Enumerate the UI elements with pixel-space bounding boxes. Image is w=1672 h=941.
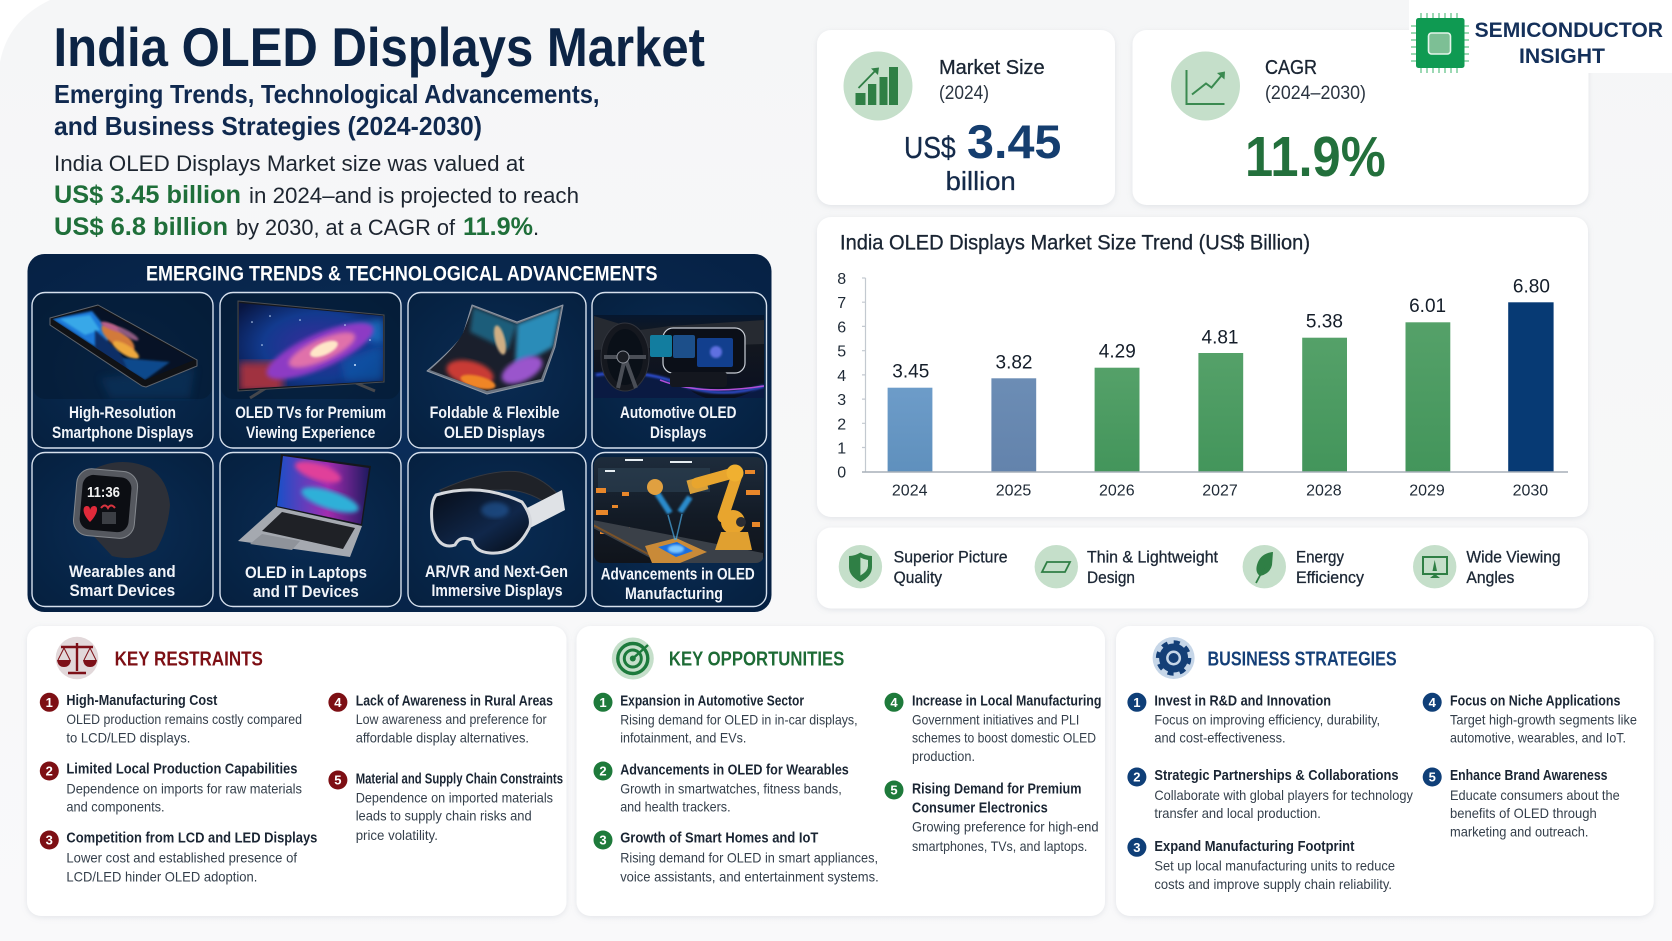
feature: wide viewing angles: [1413, 545, 1561, 588]
restraint 1: [40, 693, 302, 745]
tile labels: Smartphone Displays: [52, 424, 194, 442]
subtitle: [54, 79, 600, 141]
logo text: SEMICONDUCTOR: [1475, 19, 1663, 42]
bar value labels: 3.82: [996, 352, 1032, 373]
summary text: in 2024–and is projected to reach: [249, 183, 579, 208]
panel: business strategies: [1116, 626, 1654, 916]
feature: superior picture quality: Superior Picture: [894, 547, 1008, 566]
heading: BUSINESS STRATEGIES: [1208, 649, 1397, 671]
opportunity 4: Government initiatives and PLI: [912, 711, 1079, 727]
restraint 3: 3: [46, 833, 53, 848]
strategy 2: Collaborate with global players for technology: [1154, 787, 1413, 803]
y axis: 1: [837, 440, 846, 458]
restraint 4: affordable display alternatives.: [356, 730, 529, 746]
x axis years: 2024: [892, 483, 928, 500]
strategy 5: 5: [1429, 770, 1436, 785]
y axis: 2: [837, 416, 846, 433]
summary text: US$ 6.8 billion: [54, 213, 228, 241]
restraint 5: Dependence on imported materials: [356, 789, 553, 805]
strategy 4: Target high-growth segments like: [1450, 711, 1637, 727]
strategy 4: automotive, wearables, and IoT.: [1450, 729, 1626, 745]
subtitle: Emerging Trends, Technological Advancements,: [54, 79, 600, 109]
icon: scales: [56, 637, 98, 679]
opportunity 3: Rising demand for OLED in smart appliances,: [620, 850, 878, 866]
y axis: 4: [837, 368, 846, 385]
strategy 2: 2: [1133, 770, 1141, 785]
feature: energy efficiency: Energy: [1296, 547, 1344, 566]
strategy 4: Focus on Niche Applications: [1450, 694, 1620, 710]
CAGR value: 11.9%: [1245, 125, 1386, 189]
x axis years: 2028: [1306, 483, 1342, 500]
y axis: 5: [837, 344, 846, 361]
CAGR label: CAGR: [1265, 56, 1317, 79]
card: market size: [817, 30, 1115, 205]
tile: wearables: 11:36: [87, 484, 120, 501]
restraint 5: Material and Supply Chain Constraints: [356, 772, 563, 788]
logo text: [1475, 19, 1663, 68]
feature: superior picture quality: Quality: [894, 568, 943, 587]
feature: energy efficiency: Efficiency: [1296, 568, 1364, 587]
opportunity 4: production.: [912, 748, 975, 764]
opportunity 2: 2: [599, 764, 607, 779]
bar chart: [837, 271, 1568, 500]
market size value: 3.45: [967, 115, 1061, 168]
feature: wide viewing angles: Wide Viewing: [1466, 547, 1561, 566]
restraint 3: Competition from LCD and LED Displays: [66, 831, 317, 847]
strategy 3: costs and improve supply chain reliability.: [1154, 876, 1392, 892]
strategy 4: 4: [1429, 695, 1437, 710]
restraint 4: 4: [334, 695, 342, 710]
bar value labels: [892, 276, 1550, 383]
panel: key features: [817, 528, 1588, 608]
restraint 2: [40, 761, 302, 815]
tile labels: AR/VR and Next-Gen: [425, 563, 568, 581]
strategy 1: Invest in R&D and Innovation: [1154, 694, 1331, 710]
panel: emerging trends: [28, 254, 772, 612]
feature: thin and lightweight: Design: [1087, 568, 1135, 587]
opportunity 1: [594, 693, 858, 745]
bar value labels: 3.45: [892, 362, 929, 383]
market size label: (2024): [939, 83, 989, 104]
tile: smartphone displays: [32, 292, 213, 448]
icon: trend line: [1171, 52, 1240, 120]
restraint 5: 5: [334, 773, 342, 788]
panel: market size trend chart: [817, 217, 1588, 517]
title: India OLED Displays Market: [54, 16, 705, 78]
restraint 3: [40, 830, 317, 885]
opportunity 1: Rising demand for OLED in in-car displays,: [620, 711, 858, 727]
tile: automotive displays: [592, 292, 766, 448]
tile labels: High-Resolution: [69, 404, 176, 422]
feature: superior picture quality: [839, 545, 1008, 588]
restraint 1: OLED production remains costly compared: [66, 711, 302, 727]
bar value labels: 4.81: [1202, 327, 1238, 348]
restraint 3: LCD/LED hinder OLED adoption.: [66, 869, 257, 885]
chart heading: India OLED Displays Market Size Trend (US$ Billion): [840, 232, 1310, 254]
restraint 3: Lower cost and established presence of: [66, 850, 297, 866]
tile labels: Smart Devices: [70, 582, 175, 600]
strategy 3: Set up local manufacturing units to reduce: [1154, 858, 1395, 874]
tile labels: and IT Devices: [253, 583, 359, 601]
y axis: [837, 271, 866, 482]
restraint 5: price volatility.: [356, 827, 438, 843]
opportunity 1: infotainment, and EVs.: [620, 729, 746, 745]
card: CAGR: [1132, 30, 1588, 205]
x axis years: 2027: [1202, 483, 1238, 500]
heading: KEY OPPORTUNITIES: [669, 649, 844, 671]
opportunity 5: [884, 780, 1099, 854]
tile: AR/VR: [408, 452, 586, 606]
x axis years: 2030: [1513, 483, 1548, 500]
strategy 3: Expand Manufacturing Footprint: [1154, 839, 1355, 855]
x axis years: 2025: [996, 483, 1031, 500]
opportunity 5: smartphones, TVs, and laptops.: [912, 838, 1087, 854]
opportunity 2: Advancements in OLED for Wearables: [620, 762, 849, 778]
bars: [888, 302, 1554, 472]
tile labels: Advancements in OLED: [601, 566, 755, 584]
feature: wide viewing angles: Angles: [1466, 568, 1514, 587]
restraint 2: 2: [46, 764, 53, 779]
tile labels: Wearables and: [69, 563, 176, 581]
market size value: [904, 115, 1061, 196]
strategy 3: [1127, 838, 1395, 892]
strategy 5: [1423, 768, 1620, 840]
icon: target: [612, 638, 654, 680]
tile: laptops: [220, 452, 401, 606]
subtitle: and Business Strategies (2024-2030): [54, 111, 482, 141]
restraint 2: Limited Local Production Capabilities: [66, 761, 297, 777]
tile labels: OLED TVs for Premium: [235, 404, 386, 422]
opportunity 5: 5: [890, 783, 898, 798]
tile labels: Automotive OLED: [620, 404, 736, 422]
opportunity 2: Growth in smartwatches, fitness bands,: [620, 780, 842, 796]
tile labels: Immersive Displays: [432, 582, 562, 600]
opportunity 5: Rising Demand for Premium: [912, 781, 1081, 797]
bar value labels: 6.01: [1409, 296, 1446, 317]
icon: bar chart growth: [844, 52, 912, 120]
strategy 5: marketing and outreach.: [1450, 824, 1588, 840]
panel heading: EMERGING TRENDS & TECHNOLOGICAL ADVANCEMENTS: [146, 263, 658, 286]
x axis years: [892, 483, 1548, 500]
y axis: 7: [837, 295, 846, 312]
panel: key opportunities: [576, 626, 1105, 916]
strategy 5: Educate consumers about the: [1450, 787, 1620, 803]
restraint 5: leads to supply chain risks and: [356, 808, 532, 824]
tile labels: OLED in Laptops: [245, 564, 367, 582]
strategy 4: [1423, 693, 1637, 745]
tile labels: [52, 404, 755, 603]
bar value labels: 4.29: [1099, 342, 1136, 363]
restraint 4: [328, 693, 553, 746]
feature: thin and lightweight: Thin & Lightweight: [1087, 547, 1218, 566]
icon: gear: [1153, 637, 1195, 679]
opportunity 3: Growth of Smart Homes and IoT: [620, 831, 818, 847]
logo text: INSIGHT: [1519, 45, 1605, 68]
icon: chip: [1411, 13, 1469, 73]
opportunity 4: schemes to boost domestic OLED: [912, 729, 1096, 745]
tile: foldable displays: [408, 292, 586, 448]
restraint 2: Dependence on imports for raw materials: [66, 780, 302, 796]
strategy 1: 1: [1133, 695, 1141, 710]
opportunity 2: [594, 762, 849, 814]
opportunity 4: [884, 693, 1101, 764]
opportunity 4: Increase in Local Manufacturing: [912, 694, 1101, 710]
restraint 1: 1: [46, 695, 53, 710]
tile labels: Displays: [650, 424, 706, 442]
tile: OLED manufacturing: [592, 452, 766, 606]
summary text: 11.9%: [463, 213, 533, 241]
y axis: 0: [837, 465, 846, 482]
strategy 5: benefits of OLED through: [1450, 805, 1597, 821]
strategy 2: Strategic Partnerships & Collaborations: [1154, 768, 1398, 784]
strategy 2: [1127, 768, 1413, 821]
market size value: US$: [904, 130, 956, 165]
tile: OLED TVs: [220, 292, 401, 448]
strategy 1: [1127, 693, 1380, 745]
tile labels: Foldable & Flexible: [430, 404, 560, 422]
summary text: .: [533, 215, 539, 240]
restraint 2: and components.: [66, 799, 165, 815]
opportunity 3: 3: [599, 833, 607, 848]
heading: KEY RESTRAINTS: [115, 649, 263, 671]
tile labels: Manufacturing: [625, 585, 723, 603]
opportunity 3: voice assistants, and entertainment systems.: [620, 869, 879, 885]
opportunity 2: and health trackers.: [620, 798, 731, 814]
strategy 1: and cost-effectiveness.: [1154, 729, 1286, 745]
strategy 2: transfer and local production.: [1154, 805, 1321, 821]
opportunity 1: 1: [599, 695, 607, 710]
panel: key restraints: [27, 626, 566, 916]
y axis: 6: [837, 319, 846, 336]
x axis years: 2026: [1099, 483, 1135, 500]
opportunity 3: [594, 830, 879, 885]
opportunity 4: 4: [890, 695, 898, 710]
y axis: 3: [837, 392, 846, 409]
summary text: by 2030, at a CAGR of: [236, 215, 456, 240]
tile labels: OLED Displays: [444, 424, 545, 442]
restraint 1: High-Manufacturing Cost: [66, 693, 218, 709]
logo: Semiconductor Insight: [1409, 0, 1672, 73]
feature: thin and lightweight: [1035, 545, 1218, 588]
feature: energy efficiency: [1243, 545, 1364, 588]
tile labels: Viewing Experience: [246, 424, 375, 442]
restraint 4: Lack of Awareness in Rural Areas: [356, 693, 553, 709]
CAGR label: [1265, 56, 1366, 104]
y axis: 8: [837, 271, 846, 288]
strategy 3: 3: [1133, 840, 1141, 855]
summary text: [54, 151, 579, 241]
opportunity 5: Consumer Electronics: [912, 800, 1048, 816]
strategy 5: Enhance Brand Awareness: [1450, 768, 1608, 784]
restraint 1: to LCD/LED displays.: [66, 729, 190, 745]
tile: wearables: [32, 452, 213, 606]
summary text: US$ 3.45 billion: [54, 181, 241, 209]
strategy 1: Focus on improving efficiency, durability,: [1154, 711, 1380, 727]
CAGR label: (2024–2030): [1265, 83, 1366, 104]
opportunity 1: Expansion in Automotive Sector: [620, 694, 804, 710]
bar value labels: 5.38: [1306, 312, 1343, 333]
opportunity 5: Growing preference for high-end: [912, 819, 1099, 835]
market size value: billion: [946, 166, 1016, 196]
market size label: Market Size: [939, 56, 1045, 79]
restraint 5: [328, 770, 563, 843]
bar value labels: 6.80: [1513, 276, 1550, 297]
market size label: [939, 56, 1045, 104]
restraint 4: Low awareness and preference for: [356, 711, 547, 727]
x axis years: 2029: [1409, 483, 1445, 500]
summary text: India OLED Displays Market size was valued at: [54, 151, 524, 176]
